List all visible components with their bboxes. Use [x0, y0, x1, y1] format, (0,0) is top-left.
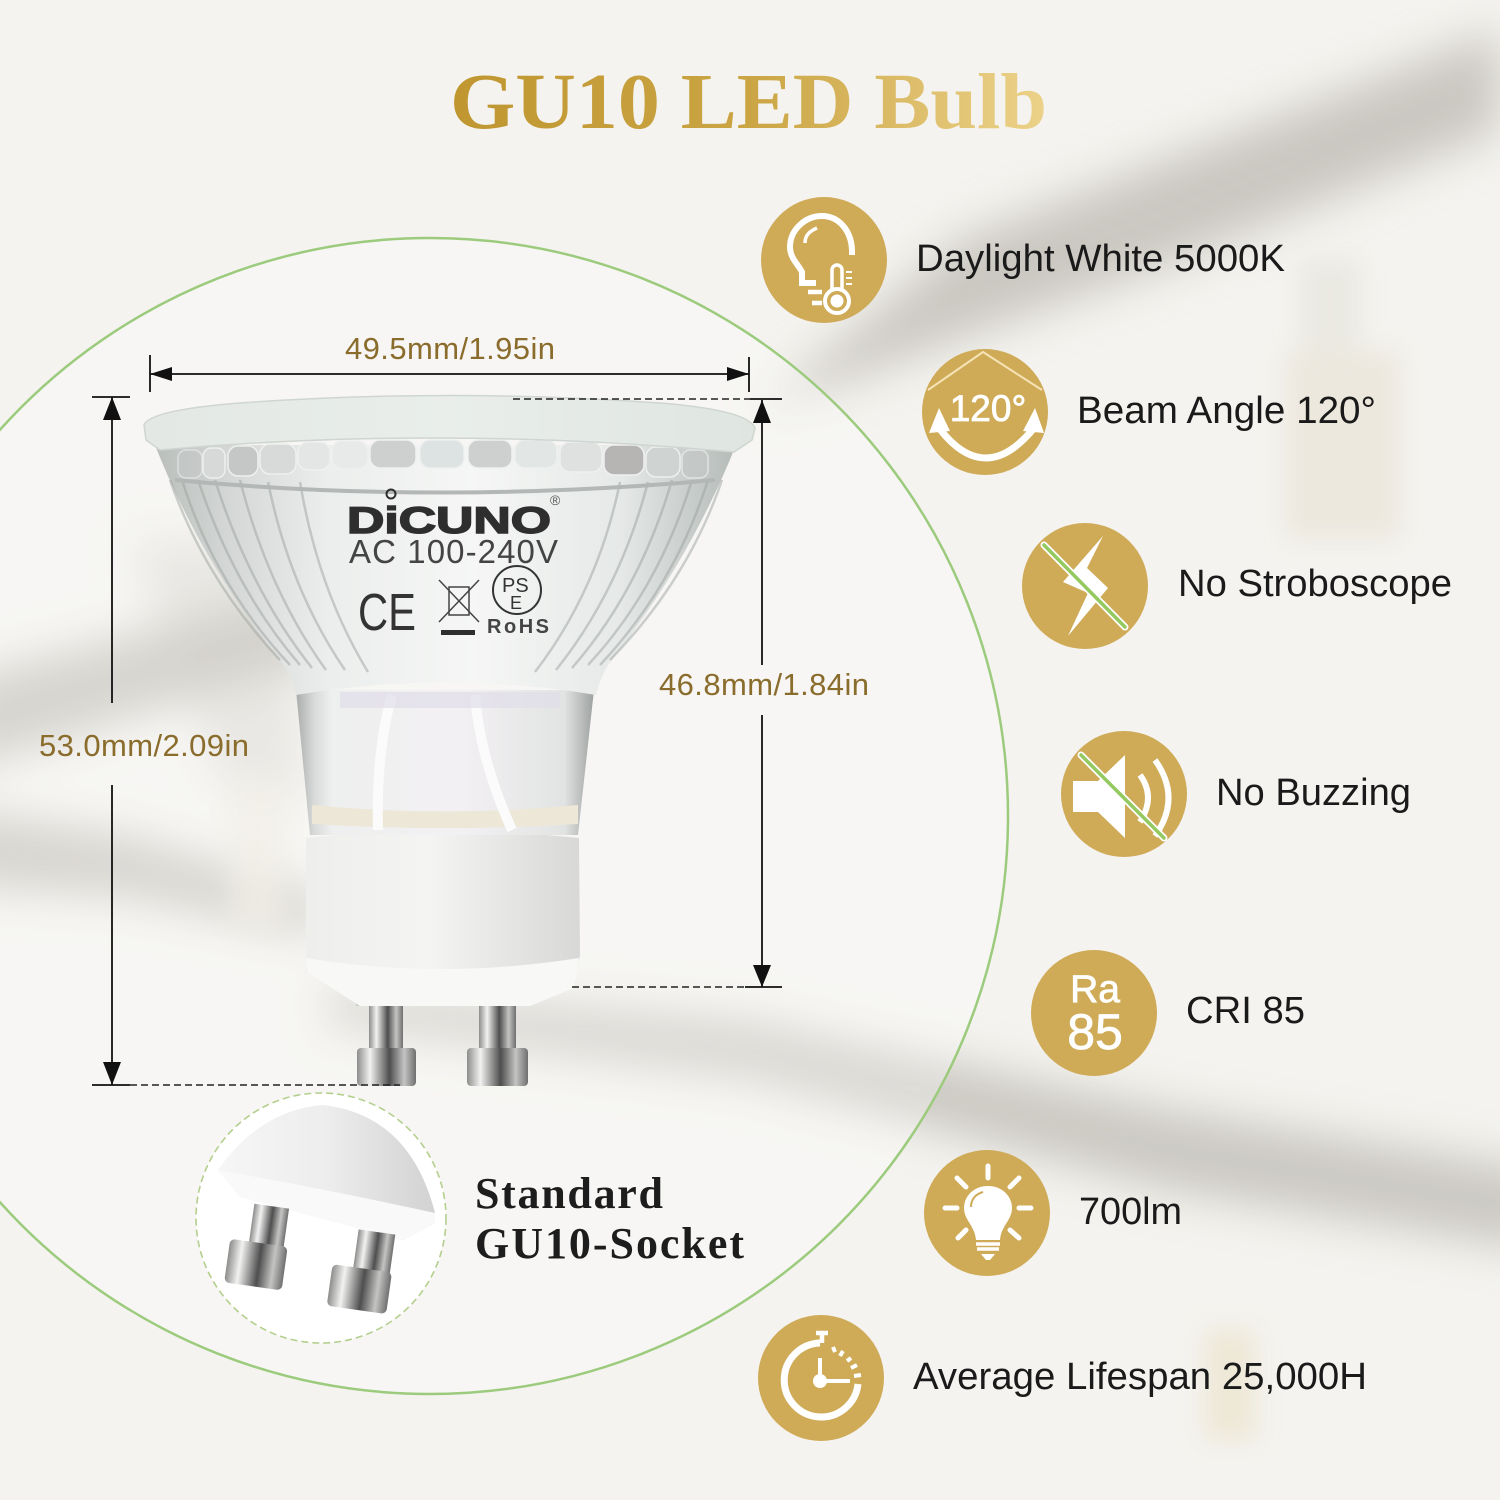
- dimension: height 53.0mm: [39, 397, 400, 1085]
- feature: no stroboscope: [1022, 523, 1452, 649]
- dimension: height 46.8mm: 46.8mm/1.84in: [659, 667, 869, 702]
- bulb brand text: RoHS: [487, 616, 549, 638]
- socket label: GU10-Socket: [475, 1219, 744, 1268]
- icon: crossed lightning bolt: [1022, 523, 1148, 649]
- bulb glass neck: [296, 690, 594, 835]
- bulb brand text: [347, 490, 561, 642]
- feature: CRI: CRI 85: [1186, 990, 1305, 1032]
- dimension: width 49.5mm: 49.5mm/1.95in: [345, 331, 555, 366]
- bulb brand text: CE: [358, 584, 416, 642]
- feature: no stroboscope: No Stroboscope: [1178, 563, 1452, 605]
- feature: lumens: 700lm: [1079, 1191, 1182, 1233]
- icon: 120 degree arc: [922, 349, 1048, 475]
- feature: lifespan: Average Lifespan 25,000H: [913, 1356, 1367, 1398]
- bulb brand text: ®: [550, 492, 561, 508]
- bulb brand text: AC 100-240V: [349, 533, 558, 570]
- feature: daylight white: [761, 197, 1285, 323]
- dimension: height 53.0mm: 53.0mm/2.09in: [39, 728, 249, 763]
- icon: Ra 85: 85: [1067, 1004, 1123, 1060]
- icon: glowing bulb: [924, 1150, 1050, 1276]
- icon: crossed speaker: [1061, 731, 1187, 857]
- bulb socket base: [306, 831, 580, 1006]
- bulb brand text: E: [510, 593, 522, 613]
- socket detail inset: [196, 1093, 446, 1343]
- bulb pins: [356, 1000, 528, 1086]
- feature: beam angle: Beam Angle 120°: [1077, 390, 1376, 432]
- feature: CRI: [1031, 950, 1305, 1076]
- dimension: height 46.8mm: [513, 399, 869, 987]
- icon: Ra 85: [1031, 950, 1157, 1076]
- title: GU10 LED Bulb: [450, 59, 1047, 146]
- icon: bulb with thermometer: [761, 197, 887, 323]
- feature: no buzzing: [1061, 731, 1411, 857]
- bulb brand text: DiCUNO: [347, 500, 551, 541]
- bulb LED scallops: [178, 440, 708, 478]
- dimension: width 49.5mm: [150, 331, 749, 392]
- icon: Ra 85: Ra: [1070, 968, 1120, 1011]
- feature: lifespan: [758, 1315, 1367, 1441]
- socket label: [475, 1169, 744, 1268]
- feature: lumens: [924, 1150, 1182, 1276]
- GU10 bulb product image: [144, 396, 755, 1086]
- large green outlined circle: [0, 238, 1008, 1394]
- bulb brand text: PS: [502, 575, 529, 597]
- feature: beam angle: [922, 349, 1376, 475]
- icon: 120 degree arc: 120°: [950, 388, 1026, 429]
- bulb rim: [144, 396, 755, 452]
- feature: daylight white: Daylight White 5000K: [916, 238, 1285, 280]
- socket label: Standard: [475, 1169, 663, 1218]
- feature: no buzzing: No Buzzing: [1216, 772, 1411, 814]
- icon: stopwatch: [758, 1315, 884, 1441]
- bulb reflector cone: [155, 445, 736, 695]
